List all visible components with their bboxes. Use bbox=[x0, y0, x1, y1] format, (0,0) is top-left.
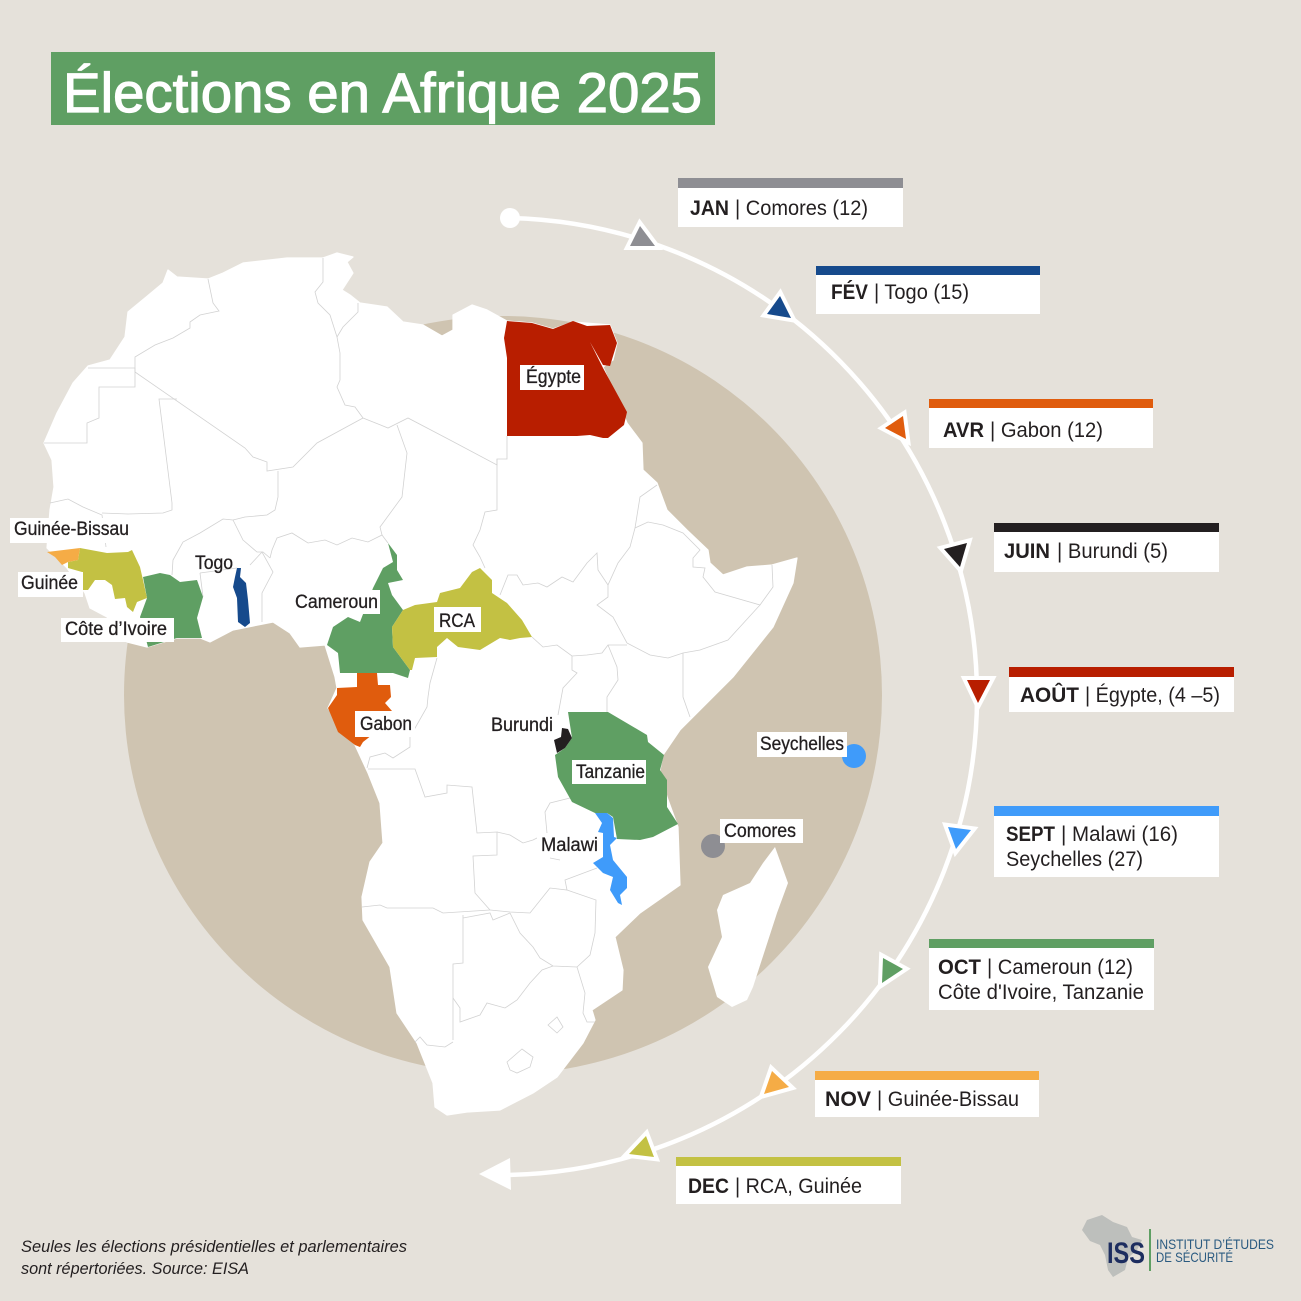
country: Gabon bbox=[328, 673, 392, 747]
logo Africa silhouette bbox=[1082, 1215, 1142, 1277]
label: Gabon: Gabon bbox=[360, 714, 412, 735]
ISS logo: ISS bbox=[1107, 1237, 1145, 1270]
card: DEC: | RCA, Guinée bbox=[735, 1174, 862, 1198]
card: FÉV: FÉV bbox=[831, 279, 869, 304]
card: JUIN: | Burundi (5) bbox=[1057, 539, 1168, 563]
label: Cameroun: Cameroun bbox=[295, 592, 378, 613]
label: Guinée-Bissau: Guinée-Bissau bbox=[14, 519, 129, 540]
card: SEPT: Seychelles (27) bbox=[1006, 847, 1143, 871]
card: JAN bbox=[678, 178, 903, 227]
card: OCT bbox=[929, 939, 1154, 1010]
footnote: Seules les élections présidentielles et parlementaires bbox=[21, 1237, 407, 1256]
country: Cameroun bbox=[327, 543, 410, 678]
card: NOV bbox=[815, 1071, 1039, 1117]
card: NOV: | Guinée-Bissau bbox=[877, 1087, 1019, 1111]
marker: Seychelles bbox=[842, 744, 866, 768]
card: SEPT bbox=[994, 806, 1219, 877]
marker: juin bbox=[944, 543, 967, 567]
map labels bbox=[10, 365, 847, 857]
marker: Comores bbox=[701, 834, 725, 858]
label: Comores: Comores bbox=[724, 821, 796, 842]
map of Africa bbox=[44, 253, 797, 1115]
country: Guinée bbox=[68, 548, 147, 612]
card: JUIN: JUIN bbox=[1004, 539, 1050, 563]
card: FÉV: | Togo (15) bbox=[874, 280, 969, 304]
card: OCT: | Cameroun (12) bbox=[987, 955, 1133, 979]
marker: septembre bbox=[948, 827, 971, 849]
card: FÉV bbox=[816, 266, 1040, 314]
card: DEC bbox=[676, 1157, 901, 1204]
country: Côte d'Ivoire bbox=[140, 573, 203, 647]
ISS logo: INSTITUT D’ÉTUDES bbox=[1156, 1236, 1274, 1252]
marker: novembre bbox=[764, 1071, 789, 1094]
start dot bbox=[500, 208, 520, 228]
label: Burundi: Burundi bbox=[491, 715, 553, 736]
country borders bbox=[44, 258, 773, 1073]
card: AVR bbox=[929, 399, 1153, 448]
label: Côte d'Ivoire: Côte d’Ivoire bbox=[65, 619, 167, 640]
label: Malawi: Malawi bbox=[541, 835, 598, 856]
card: JUIN bbox=[994, 523, 1219, 572]
marker: janvier bbox=[630, 226, 655, 246]
footnote bbox=[21, 1237, 407, 1278]
marker: février bbox=[767, 296, 791, 318]
mainland silhouette bbox=[44, 253, 797, 1115]
card: SEPT: SEPT bbox=[1006, 822, 1055, 846]
country: Burundi bbox=[554, 728, 572, 753]
marker: octobre bbox=[882, 958, 903, 983]
ISS logo bbox=[1082, 1215, 1274, 1277]
country: RCA bbox=[392, 568, 532, 670]
marker: août bbox=[967, 680, 990, 703]
label: RCA: RCA bbox=[439, 611, 475, 632]
timeline arc with arrow bbox=[479, 208, 977, 1190]
end arrowhead bbox=[479, 1158, 511, 1190]
background circle bbox=[124, 316, 882, 1074]
card: OCT: OCT bbox=[938, 955, 981, 979]
card: OCT: Côte d'Ivoire, Tanzanie bbox=[938, 980, 1144, 1004]
title: Élections en Afrique 2025 bbox=[63, 61, 702, 124]
marker: avril bbox=[885, 416, 906, 439]
country: Guinée-Bissau bbox=[47, 548, 80, 565]
label: Égypte: Égypte bbox=[526, 367, 581, 388]
island: Madagascar bbox=[708, 847, 788, 1007]
timeline markers bbox=[629, 226, 990, 1157]
card: DEC: DEC bbox=[688, 1174, 729, 1198]
calendar cards bbox=[676, 178, 1234, 1204]
card: AVR: | Gabon (12) bbox=[990, 418, 1103, 442]
country: Égypte bbox=[504, 321, 627, 438]
country: Tanzanie bbox=[555, 712, 678, 840]
label: Seychelles: Seychelles bbox=[760, 734, 844, 755]
footnote: sont répertoriées. Source: EISA bbox=[21, 1259, 249, 1278]
marker: décembre bbox=[629, 1136, 654, 1157]
card: JAN: | Comores (12) bbox=[735, 196, 868, 220]
card: NOV: NOV bbox=[825, 1087, 872, 1111]
card: AVR: AVR bbox=[943, 418, 984, 442]
country: Togo bbox=[233, 568, 250, 627]
ISS logo: DE SÉCURITÉ bbox=[1156, 1249, 1233, 1265]
label: Tanzanie: Tanzanie bbox=[576, 762, 645, 783]
card: JAN: JAN bbox=[690, 196, 729, 220]
card: SEPT: | Malawi (16) bbox=[1061, 822, 1178, 846]
country: Malawi bbox=[593, 813, 627, 905]
label: Guinée: Guinée bbox=[21, 573, 78, 594]
card: AOÛT: AOÛT bbox=[1020, 682, 1079, 707]
card: AOÛT bbox=[1009, 667, 1234, 712]
card: AOÛT: | Égypte, (4 –5) bbox=[1085, 682, 1220, 707]
label: Togo: Togo bbox=[195, 553, 233, 574]
